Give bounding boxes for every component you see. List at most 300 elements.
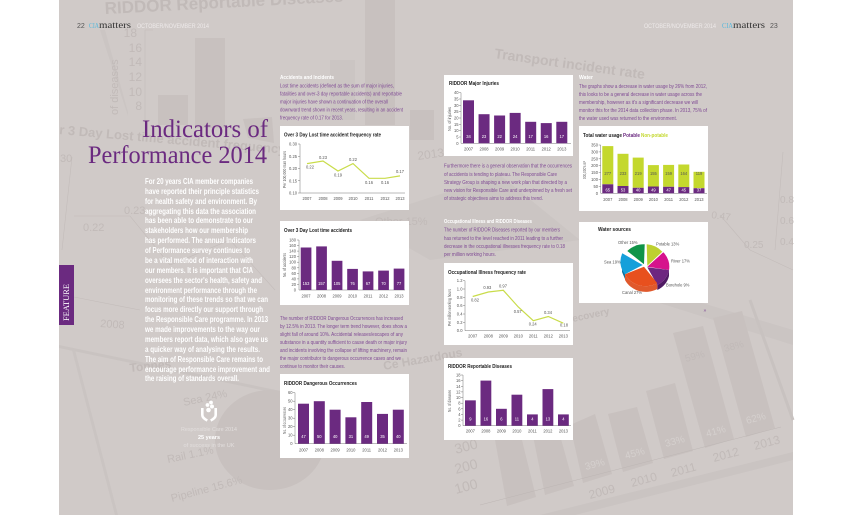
panel: accident frequency line chart: 0.30 — [289, 142, 298, 146]
text: dangerous occurrences: and incidents involving the collapse of lifting machinery, remain — [280, 348, 407, 354]
panel: total water usage stacked bar chart: 155 — [650, 171, 658, 176]
panel: accident frequency line chart: 0.16 — [381, 180, 390, 185]
panel: occupational illness line chart: 0.24 — [529, 322, 537, 326]
panel: occupational illness line chart: 0.57 — [514, 309, 522, 314]
text: occupational illness: Occupational Illness and RIDDOR Diseases — [444, 219, 532, 225]
panel: RIDDOR dangerous occurrences bar chart: 47 — [301, 434, 306, 439]
panel: total water usage stacked bar chart: 0 — [596, 191, 599, 196]
text: plateau observation: new vision for Responsible Care and underpinned by a fresh set — [444, 188, 572, 194]
panel: water sources pie chart: Water sources — [598, 227, 631, 233]
panel: RIDDOR reportable diseases bar chart: 6 — [500, 416, 503, 422]
panel: accident frequency line chart: 0.16 — [365, 180, 374, 185]
panel: total water usage stacked bar chart: 50 — [593, 184, 599, 189]
ghost background charts: 0.22 — [83, 222, 104, 234]
panel: RIDDOR major injuries bar chart: 0 — [456, 141, 459, 146]
panel: total water usage stacked bar chart: Non-potable — [641, 133, 669, 139]
text: accidents and incidents: downward trend shown in recent years, resulting in an accident — [280, 108, 403, 114]
panel: RIDDOR reportable diseases bar chart: 2012 — [543, 428, 553, 434]
intro text: a quicker way of analysing the results. — [145, 345, 260, 354]
panel: water sources pie chart: Sea 19% — [604, 260, 621, 264]
ghost background charts: 30 — [60, 153, 72, 165]
panel: RIDDOR reportable diseases bar chart: 12 — [456, 389, 461, 394]
panel: RIDDOR major injuries bar chart: 40 — [454, 90, 459, 95]
text: plateau observation — [444, 164, 572, 202]
panel: RIDDOR dangerous occurrences bar chart: 2012 — [378, 448, 388, 452]
ghost background charts: 39% — [584, 457, 606, 473]
panel: RIDDOR reportable diseases bar chart: 6 — [458, 406, 461, 411]
panel: accident frequency line chart: 2009 — [333, 196, 343, 201]
panel: lost time accidents bar chart: 2013 — [394, 294, 404, 298]
intro text: the Responsible Care programme. In 2013 — [145, 315, 268, 324]
header left: 22 — [77, 23, 85, 30]
panel: lost time accidents bar chart: 76 — [350, 281, 355, 286]
ghost background charts: 33% — [664, 434, 686, 450]
panel: occupational illness line chart — [444, 263, 573, 345]
text: accidents and incidents: fatalities and over-3 day reportable accidents) and reportable — [280, 92, 402, 98]
panel: lost time accidents bar chart: 2010 — [348, 294, 358, 298]
ghost background charts: 0.8 — [780, 195, 794, 206]
panel: occupational illness line chart: 0.8 — [457, 295, 463, 300]
panel: RIDDOR major injuries bar chart: 17 — [528, 134, 534, 139]
intro text: we made improvements to the way our — [144, 325, 260, 334]
panel: total water usage stacked bar chart: 2009 — [634, 197, 643, 202]
header right — [644, 21, 778, 31]
ghost background charts: of diseases — [109, 59, 121, 115]
panel: occupational illness line chart: 0.6 — [457, 303, 463, 308]
panel: RIDDOR major injuries bar chart: 25 — [454, 109, 459, 114]
panel: total water usage stacked bar chart: 40 — [636, 188, 641, 192]
panel: RIDDOR reportable diseases bar chart: 4 — [531, 416, 534, 422]
panel: accident frequency line chart: 2010 — [348, 196, 358, 201]
text: water — [579, 75, 707, 122]
text: water: membership, however as it's a significant decrease we will — [579, 100, 698, 106]
panel: accident frequency line chart: 0.22 — [349, 157, 358, 162]
panel: RIDDOR reportable diseases bar chart: 13 — [546, 416, 551, 422]
panel: total water usage stacked bar chart: Total water usage — [583, 133, 623, 139]
ghost background charts: 62% — [745, 411, 767, 427]
feature tab — [59, 265, 74, 325]
text: accidents and incidents: frequency rate of 0.17 for 2013. — [280, 116, 343, 122]
panel: RIDDOR major injuries bar chart: 2008 — [479, 146, 489, 152]
panel: total water usage stacked bar chart: 277 — [604, 171, 612, 176]
panel: RIDDOR dangerous occurrences bar chart: RIDDOR Dangerous Occurrences — [284, 381, 357, 387]
ghost background charts: 2011 — [669, 460, 698, 480]
panel: lost time accidents bar chart: 157 — [318, 281, 326, 286]
panel: RIDDOR dangerous occurrences bar chart — [280, 374, 409, 458]
panel: RIDDOR dangerous occurrences bar chart: 2009 — [331, 448, 340, 452]
panel: lost time accidents bar chart: 2009 — [332, 294, 342, 298]
panel: total water usage stacked bar chart: 2007 — [603, 197, 613, 202]
intro text: has been able to demonstrate to our — [145, 216, 253, 225]
panel: accident frequency line chart: 2012 — [380, 196, 390, 201]
panel: RIDDOR major injuries bar chart: 30 — [454, 103, 459, 108]
ghost background charts: 0.25 — [744, 240, 764, 251]
panel: RIDDOR reportable diseases bar chart — [444, 358, 573, 440]
ghost background charts: 38% — [723, 339, 745, 355]
intro text — [144, 177, 270, 383]
ghost background charts: Pipeline 15.6% — [170, 474, 244, 505]
panel: occupational illness line chart: 2012 — [544, 334, 554, 338]
title: Indicators of — [142, 116, 269, 143]
panel: occupational illness line chart: 0.93 — [483, 285, 492, 290]
panel: RIDDOR dangerous occurrences bar chart: 50 — [317, 434, 322, 439]
panel: RIDDOR reportable diseases bar chart: 2009 — [497, 428, 507, 434]
text: water: The graphs show a decrease in water usage by 26% from 2012, — [579, 84, 707, 90]
ghost background charts: 14 — [129, 55, 142, 69]
panel: total water usage stacked bar chart: 49 — [651, 188, 656, 192]
panel: RIDDOR reportable diseases bar chart: 0 — [458, 423, 461, 428]
responsible care caption: Responsible Care 2014 — [181, 427, 237, 433]
panel: accident frequency line chart: 0.15 — [289, 178, 298, 183]
ghost background charts: 2009 — [587, 481, 617, 502]
text: water: Water — [579, 75, 594, 81]
panel: RIDDOR major injuries bar chart: 2010 — [511, 146, 520, 152]
panel: RIDDOR dangerous occurrences bar chart: 40 — [288, 407, 293, 412]
ghost background charts: Ce Hazardous — [382, 345, 464, 373]
panel: occupational illness line chart: 0.34 — [544, 310, 553, 315]
panel: RIDDOR dangerous occurrences bar chart: 40 — [333, 434, 338, 439]
header right: CIA — [722, 22, 733, 30]
panel: RIDDOR major injuries bar chart: 35 — [454, 96, 459, 102]
panel: lost time accidents bar chart: No. of accidents — [282, 253, 287, 277]
panel: total water usage stacked bar chart: 2012 — [679, 197, 689, 202]
intro text: oversees the sector's health, safety and — [145, 276, 262, 285]
text: dangerous occurrences — [280, 316, 408, 370]
panel: RIDDOR major injuries bar chart: 17 — [560, 134, 565, 139]
ghost background charts: r 3 Day Lost time accident frequency — [59, 122, 287, 157]
panel: RIDDOR reportable diseases bar chart: 16 — [484, 416, 489, 422]
intro text: has performed. The annual Indicators — [145, 236, 256, 245]
ghost background charts: Other 15% — [375, 216, 428, 228]
panel: RIDDOR reportable diseases bar chart: 4 — [562, 416, 565, 422]
panel: RIDDOR dangerous occurrences bar chart: 49 — [364, 434, 370, 439]
panel: lost time accidents bar chart: 2011 — [364, 294, 373, 298]
feature tab: FEATURE — [62, 284, 71, 321]
ghost background charts: 41% — [705, 424, 727, 440]
header right: 23 — [770, 23, 778, 30]
panel: total water usage stacked bar chart: 000,000's m³ — [582, 161, 587, 179]
ghost background charts: 12 — [129, 70, 142, 84]
intro text: The aim of Responsible Care remains to — [145, 355, 263, 364]
panel: RIDDOR major injuries bar chart — [444, 75, 573, 156]
ghost background charts: 8 — [135, 99, 142, 113]
panel: occupational illness line chart: 2007 — [468, 334, 478, 338]
icon: responsible care hands — [202, 401, 216, 420]
panel: RIDDOR dangerous occurrences bar chart: 2010 — [346, 448, 356, 452]
panel: lost time accidents bar chart: 153 — [303, 281, 310, 286]
panel: accident frequency line chart: 0.19 — [334, 172, 343, 178]
panel: lost time accidents bar chart: 140 — [289, 249, 297, 254]
panel: RIDDOR dangerous occurrences bar chart: 2007 — [299, 448, 309, 452]
text: accidents and incidents: Accidents and Incidents — [280, 75, 334, 81]
header right: OCTOBER/NOVEMBER 2014 — [644, 23, 716, 30]
panel: accident frequency line chart — [280, 126, 409, 210]
panel: total water usage stacked bar chart: 300 — [591, 149, 599, 154]
text: water: the water used was returned to the environment. — [579, 116, 677, 122]
panel: lost time accidents bar chart: 80 — [291, 265, 297, 270]
ghost background charts: 2013 — [416, 145, 445, 163]
panel: accident frequency line chart: 0.22 — [306, 164, 315, 170]
panel: occupational illness line chart: Occupational Illness frequency rate — [448, 270, 527, 276]
panel: total water usage stacked bar chart: 219 — [635, 171, 642, 176]
panel: RIDDOR dangerous occurrences bar chart: 10 — [288, 433, 293, 438]
panel: occupational illness line chart: 2008 — [484, 334, 494, 338]
panel: RIDDOR major injuries bar chart: 2011 — [526, 146, 536, 152]
panel: lost time accidents bar chart: 20 — [291, 282, 297, 287]
text: plateau observation: of accidents is tending to plateau. The Responsible Care — [444, 172, 557, 178]
ghost background charts: 0.4 — [780, 237, 794, 248]
ghost background charts: Transport incident rate — [494, 45, 646, 82]
panel: total water usage stacked bar chart: 233 — [620, 171, 627, 176]
panel: RIDDOR dangerous occurrences bar chart: 40 — [396, 434, 401, 439]
panel: RIDDOR reportable diseases bar chart: 2008 — [481, 428, 491, 434]
intro text: environment performance through the — [145, 286, 257, 295]
panel: occupational illness line chart: 1.0 — [457, 286, 463, 292]
ghost background charts: 18 — [124, 26, 137, 40]
panel: lost time accidents bar chart: 120 — [289, 254, 297, 259]
panel: total water usage stacked bar chart: 350 — [591, 142, 599, 148]
panel: RIDDOR reportable diseases bar chart: 2 — [458, 418, 461, 423]
panel: occupational illness line chart: 2013 — [559, 334, 569, 338]
panel: total water usage stacked bar chart: 45 — [682, 188, 687, 192]
panel: RIDDOR dangerous occurrences bar chart: 20 — [288, 424, 293, 429]
panel: lost time accidents bar chart — [280, 221, 409, 305]
header left: CIA — [89, 22, 99, 30]
panel: total water usage stacked bar chart: 2008 — [618, 197, 628, 202]
panel: occupational illness line chart: 0.97 — [499, 284, 508, 288]
panel: lost time accidents bar chart: 0 — [294, 288, 297, 292]
panel: total water usage stacked bar chart: 200 — [591, 163, 599, 168]
panel: lost time accidents bar chart: 2007 — [301, 294, 311, 298]
panel: accident frequency line chart: Over 3 Day Lost time accident frequency rate — [284, 132, 382, 138]
ghost background charts: 59% — [684, 349, 706, 365]
intro text: For 20 years CIA member companies — [145, 177, 253, 186]
ghost background charts: 0.23 — [124, 205, 145, 217]
panel: RIDDOR reportable diseases bar chart: 2007 — [466, 428, 476, 434]
ghost background charts: 300 — [453, 435, 480, 457]
text: dangerous occurrences: continue to monitor their causes. — [280, 364, 345, 370]
panel: RIDDOR major injuries bar chart: 16 — [544, 134, 549, 139]
header left: matters — [99, 21, 131, 31]
panel: lost time accidents bar chart: 2008 — [317, 294, 327, 298]
panel: RIDDOR major injuries bar chart: RIDDOR Major Injuries — [449, 81, 499, 87]
panel: RIDDOR major injuries bar chart: 23 — [482, 134, 487, 139]
panel: lost time accidents bar chart: 2012 — [379, 294, 389, 298]
panel: total water usage stacked bar chart: 65 — [606, 188, 611, 192]
ghost background charts: Sea 24% — [182, 388, 229, 409]
panel: total water usage stacked bar chart: 159 — [665, 171, 673, 176]
text: dangerous occurrences: the major contributor to dangerous occurrence cases and we — [280, 356, 401, 362]
panel: lost time accidents bar chart: Over 3 Day Lost time accidents — [284, 228, 352, 234]
intro text: our members. It is important that CIA — [145, 266, 253, 275]
panel: occupational illness line chart: 0.18 — [560, 322, 569, 328]
panel: accident frequency line chart: 0.23 — [319, 155, 328, 160]
ghost background charts: 0.47 — [711, 210, 732, 224]
panel: RIDDOR major injuries bar chart: 10 — [454, 128, 459, 133]
panel: RIDDOR dangerous occurrences bar chart: 2013 — [394, 448, 404, 452]
panel: RIDDOR reportable diseases bar chart: 8 — [458, 401, 461, 406]
panel: water sources pie chart: Other 15% — [618, 240, 638, 245]
panel: RIDDOR reportable diseases bar chart: 18 — [456, 372, 461, 378]
ghost background charts: ecovery — [571, 306, 611, 325]
header left — [77, 21, 209, 31]
text: accidents and incidents: Lost time accidents (defined as the sum of major injuries, — [280, 84, 394, 90]
panel: accident frequency line chart: 0.10 — [289, 190, 298, 196]
ghost background charts: 2012 — [711, 444, 741, 465]
text: dangerous occurrences: by 12.5% in 2013. The longer term trend however, does show a — [280, 324, 408, 330]
panel: accident frequency line chart: 0.25 — [289, 154, 298, 159]
ghost background charts: 100 — [453, 475, 480, 497]
panel: RIDDOR dangerous occurrences bar chart: 60 — [288, 390, 293, 395]
panel: RIDDOR major injuries bar chart: 24 — [513, 134, 518, 139]
ghost background charts: 200 — [453, 455, 480, 477]
panel: RIDDOR major injuries bar chart: 2007 — [464, 146, 474, 152]
panel: occupational illness line chart: 2011 — [529, 334, 538, 338]
panel: RIDDOR dangerous occurrences bar chart: 2011 — [362, 448, 372, 452]
text: dangerous occurrences: The number of RIDDOR Dangerous Occurrences has increased — [280, 316, 403, 322]
panel: water sources pie chart: Borehole 9% — [666, 282, 690, 288]
panel: RIDDOR dangerous occurrences bar chart: No. of occurrences — [282, 407, 287, 434]
title: Performance 2014 — [88, 142, 267, 169]
panel: RIDDOR major injuries bar chart: No. of injuries — [447, 107, 452, 131]
panel: lost time accidents bar chart: 100 — [289, 260, 297, 265]
header left: OCTOBER/NOVEMBER 2014 — [137, 23, 209, 30]
panel: total water usage stacked bar chart: 2010 — [649, 197, 659, 202]
panel: lost time accidents bar chart: 70 — [381, 281, 386, 286]
text: plateau observation: of strategic objectives aims to address this trend. — [444, 196, 543, 202]
ghost background charts: 45% — [624, 446, 646, 462]
responsible care caption: of success in the UK — [184, 443, 235, 449]
text: water: this looks to be a general decrease in water usage across the — [579, 92, 702, 98]
panel: RIDDOR major injuries bar chart: 2009 — [495, 146, 505, 152]
text: dangerous occurrences: substance in a quantity sufficient to cause death or major injury — [280, 340, 407, 346]
panel: accident frequency line chart: 2008 — [318, 196, 328, 201]
panel: occupational illness line chart: 0.0 — [457, 328, 463, 333]
panel: accident frequency line chart: 2011 — [365, 196, 374, 201]
text: dangerous occurrences: slight fall of around 10%. Accidental releases/escapes of any — [280, 332, 403, 338]
panel: RIDDOR reportable diseases bar chart: 14 — [456, 384, 461, 389]
panel: lost time accidents bar chart: 40 — [291, 276, 297, 281]
ghost background charts: 2010 — [629, 469, 659, 490]
intro text: be a vital method of interaction with — [145, 256, 253, 265]
panel: total water usage stacked bar chart: 250 — [591, 156, 599, 161]
text: plateau observation: Strategy Group is shaping a new work plan that directed by a — [444, 180, 568, 186]
panel: occupational illness line chart: 0.4 — [457, 312, 463, 316]
panel: RIDDOR reportable diseases bar chart: 2011 — [528, 428, 538, 434]
intro text: stakeholders how our membership — [145, 226, 248, 235]
panel: RIDDOR major injuries bar chart: 2013 — [557, 146, 567, 152]
panel: RIDDOR reportable diseases bar chart: 4 — [458, 412, 461, 417]
panel: water sources pie chart — [579, 222, 708, 303]
ghost background charts: 16 — [129, 41, 142, 55]
panel: occupational illness line chart: 2010 — [514, 334, 524, 338]
panel: water sources pie chart: Potable 13% — [656, 242, 680, 246]
responsible care caption — [181, 427, 237, 449]
panel: accident frequency line chart: 0.20 — [289, 166, 298, 171]
panel: accident frequency line chart: 0.17 — [396, 169, 405, 174]
intro text: monitoring of these trends so that we can — [145, 295, 268, 304]
intro text: encourage performance improvement and — [145, 365, 270, 374]
panel: total water usage stacked bar chart: 37 — [697, 188, 702, 192]
responsible care caption: 25 years — [198, 435, 220, 441]
intro text: for health safety and environment. By — [145, 197, 257, 206]
panel: RIDDOR major injuries bar chart: 22 — [497, 134, 503, 139]
panel: lost time accidents bar chart: 67 — [366, 281, 371, 286]
panel: total water usage stacked bar chart: 2013 — [694, 197, 704, 202]
ghost background charts: Tonnes — [129, 357, 172, 375]
panel: total water usage stacked bar chart: 150 — [591, 170, 599, 175]
panel: RIDDOR reportable diseases bar chart: 9 — [469, 416, 472, 422]
panel: water sources pie chart: Canal 27% — [622, 290, 642, 295]
text: accidents and incidents: major injuries have shown a continuation of the overall — [280, 100, 388, 106]
panel: total water usage stacked bar chart: Potable — [623, 133, 641, 139]
ghost background charts: 2013 — [752, 432, 782, 453]
intro text: the raising of standards overall. — [145, 374, 239, 383]
intro text: members report data, which also gave us — [145, 335, 268, 344]
panel: RIDDOR reportable diseases bar chart: RIDDOR Reportable Diseases — [448, 364, 512, 370]
text: water: monitor this for the 2014 data collection phase. In 2013, 75% of — [579, 108, 707, 114]
panel: RIDDOR reportable diseases bar chart: 11 — [515, 416, 520, 422]
ghost background charts: 2008 — [100, 318, 125, 332]
panel: RIDDOR reportable diseases bar chart: 2010 — [512, 428, 522, 434]
panel: RIDDOR reportable diseases bar chart: No. of diseases — [447, 390, 452, 412]
intro text: focus more directly our support through — [145, 305, 263, 314]
panel: accident frequency line chart: Per 100,000 man hours — [282, 151, 287, 188]
panel: total water usage stacked bar chart: 119 — [696, 171, 703, 176]
text: plateau observation: Furthermore there is a general observation that the occurrences — [444, 164, 572, 170]
panel: RIDDOR reportable diseases bar chart: 16 — [456, 378, 461, 383]
panel: lost time accidents bar chart: 105 — [334, 281, 341, 286]
panel: RIDDOR reportable diseases bar chart: 10 — [456, 395, 461, 400]
panel: RIDDOR major injuries bar chart: 15 — [454, 122, 459, 127]
panel: lost time accidents bar chart: 60 — [291, 271, 297, 276]
panel: lost time accidents bar chart: 180 — [289, 238, 297, 242]
panel: occupational illness line chart: Per million working hours — [447, 289, 452, 326]
panel: RIDDOR dangerous occurrences bar chart: 2008 — [315, 448, 325, 452]
text: occupational illness — [444, 219, 565, 258]
ghost background charts: 400 — [453, 415, 480, 437]
panel: RIDDOR reportable diseases bar chart: 2013 — [559, 428, 569, 434]
panel: total water usage stacked bar chart: 100 — [591, 177, 599, 182]
panel: accident frequency line chart: 2007 — [302, 196, 312, 201]
panel: RIDDOR major injuries bar chart: 5 — [456, 134, 459, 140]
panel: water sources pie chart: River 17% — [671, 258, 690, 264]
panel: RIDDOR major injuries bar chart: 20 — [454, 116, 459, 120]
panel: occupational illness line chart: 0.2 — [457, 320, 463, 325]
panel: RIDDOR dangerous occurrences bar chart: 50 — [288, 399, 293, 404]
title — [88, 116, 269, 169]
panel: occupational illness line chart: 1.2 — [457, 278, 463, 283]
panel: occupational illness line chart: 2009 — [499, 334, 509, 338]
intro text: aggregating this data the association — [145, 207, 256, 216]
panel: RIDDOR dangerous occurrences bar chart: 35 — [380, 434, 385, 439]
panel: total water usage stacked bar chart: 164 — [680, 171, 688, 176]
intro text: of Performance survey continues to — [145, 246, 250, 255]
panel: RIDDOR dangerous occurrences bar chart: 30 — [288, 416, 293, 421]
panel: total water usage stacked bar chart — [579, 126, 708, 211]
ghost background charts: 0.6 — [780, 216, 794, 227]
ghost background charts: 10 — [129, 85, 142, 99]
panel: accident frequency line chart: 2013 — [395, 196, 405, 201]
text: accidents and incidents — [280, 75, 403, 122]
continuation arrows: » — [704, 308, 706, 314]
panel: RIDDOR dangerous occurrences bar chart: 31 — [349, 434, 354, 439]
ghost background charts: Rail 1.1% — [166, 444, 215, 466]
intro text: have reported their principle statistics — [145, 187, 259, 196]
header right: matters — [733, 21, 765, 31]
panel: RIDDOR major injuries bar chart: 34 — [466, 134, 471, 139]
panel: total water usage stacked bar chart: 53 — [621, 188, 626, 192]
